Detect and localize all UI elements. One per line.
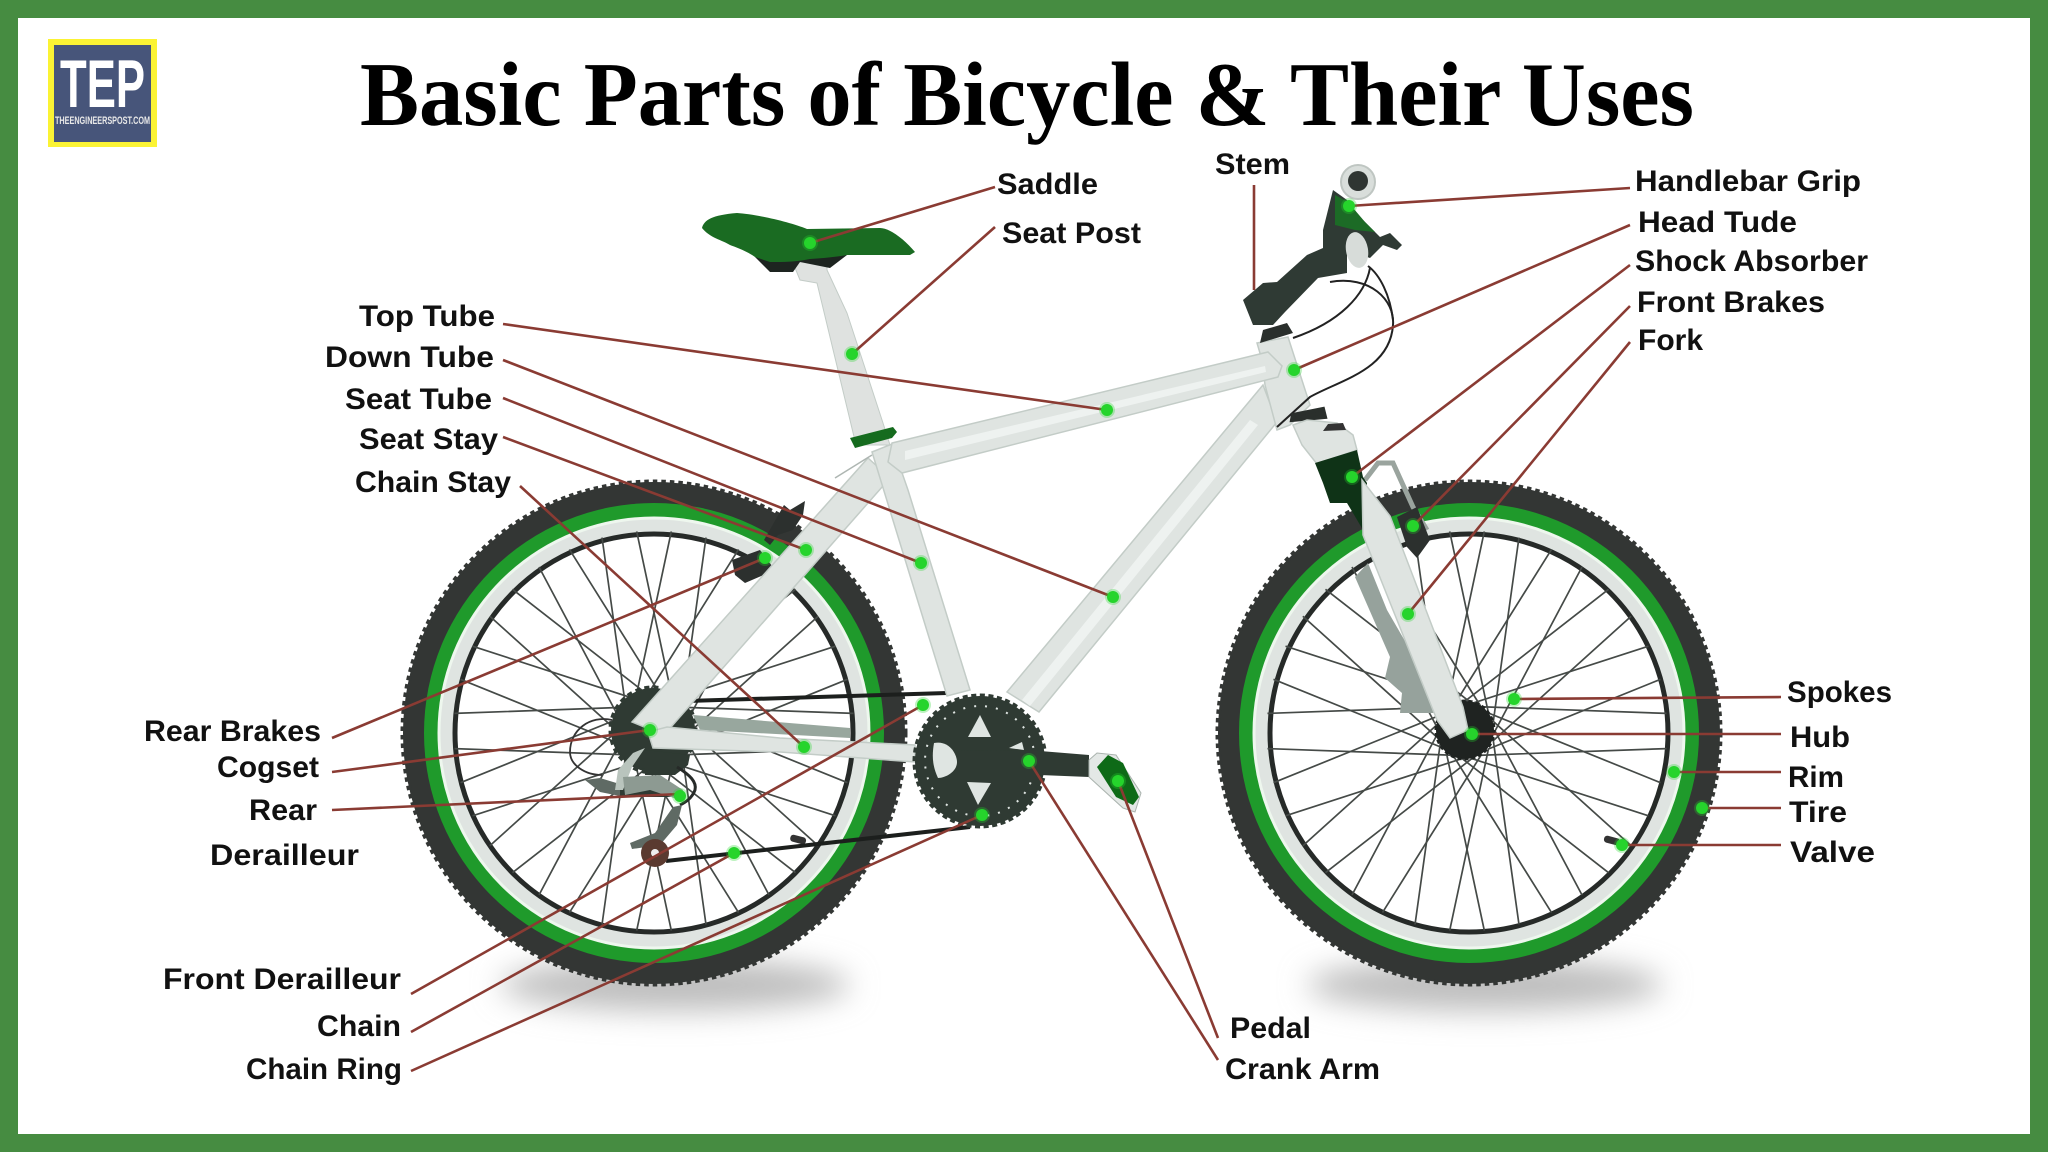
title: Basic Parts of Bicycle & Their Uses xyxy=(360,44,1694,145)
label: Stem: Stem xyxy=(1215,148,1290,181)
label: Valve: Valve xyxy=(1790,836,1875,869)
label: Front Brakes: Front Brakes xyxy=(1637,286,1825,319)
seat stay xyxy=(632,458,890,735)
grip xyxy=(1341,165,1375,199)
chain stay shadow xyxy=(693,715,850,738)
top tube xyxy=(888,352,1282,473)
brake lever xyxy=(1343,230,1371,270)
down tube xyxy=(1007,385,1277,712)
fork xyxy=(1362,480,1468,738)
label: Spokes: Spokes xyxy=(1787,676,1892,709)
highlight on top tube xyxy=(905,366,1266,460)
label: Down Tube: Down Tube xyxy=(325,341,494,374)
label: Fork: Fork xyxy=(1638,324,1703,357)
logo: TEP: TEP xyxy=(60,46,145,122)
label: Pedal: Pedal xyxy=(1230,1012,1311,1045)
logo: TEP xyxy=(48,39,157,147)
label: Handlebar Grip: Handlebar Grip xyxy=(1635,165,1861,198)
label: Crank Arm: Crank Arm xyxy=(1225,1053,1380,1086)
label: Seat Tube: Seat Tube xyxy=(345,383,492,416)
label: Front Derailleur: Front Derailleur xyxy=(163,963,401,996)
label: Rim: Rim xyxy=(1788,761,1844,794)
wheel shadows xyxy=(500,959,1663,1011)
front brake xyxy=(1365,463,1430,558)
saddle xyxy=(702,213,915,272)
label: Head Tude: Head Tude xyxy=(1638,206,1797,239)
label: Seat Post: Seat Post xyxy=(1002,217,1141,250)
label: Seat Stay: Seat Stay xyxy=(359,423,498,456)
label: Saddle: Saddle xyxy=(997,168,1098,201)
front hub disc xyxy=(1436,701,1494,759)
cogset xyxy=(611,688,695,772)
fork inner leg xyxy=(1355,563,1437,713)
crank arm xyxy=(960,750,1089,777)
pedal xyxy=(1089,753,1141,812)
label: Cogset: Cogset xyxy=(217,751,319,784)
label: Chain Ring: Chain Ring xyxy=(246,1053,402,1086)
valves xyxy=(789,834,1621,846)
head tube xyxy=(1257,337,1310,430)
green marker dots xyxy=(644,200,1708,859)
label: Rear Brakes: Rear Brakes xyxy=(144,715,321,748)
logo: TEP: THEENGINEERSPOST.COM xyxy=(55,115,150,127)
label: Shock Absorber: Shock Absorber xyxy=(1635,245,1868,278)
brake cable loop at rear xyxy=(570,719,612,775)
leader lines xyxy=(332,185,1781,1071)
label: Derailleur: Derailleur xyxy=(210,839,359,872)
fork crown xyxy=(1292,409,1357,464)
label: Chain: Chain xyxy=(317,1010,401,1043)
seat clamp xyxy=(850,427,897,448)
chain ring xyxy=(915,696,1045,826)
label: Chain Stay: Chain Stay xyxy=(355,466,511,499)
front wheel xyxy=(1218,482,1720,984)
label: Rear: Rear xyxy=(249,794,317,827)
frame xyxy=(632,337,1310,762)
green grip tint xyxy=(1335,195,1375,232)
seat tube xyxy=(872,444,970,696)
handlebar and stem xyxy=(1243,165,1402,343)
chain xyxy=(666,693,970,861)
rear wheel xyxy=(403,482,905,984)
shock absorber xyxy=(1315,450,1367,530)
thin brace xyxy=(835,455,872,478)
label: Hub: Hub xyxy=(1790,721,1850,754)
label: Tire: Tire xyxy=(1789,796,1847,829)
seat post xyxy=(793,258,890,445)
rear derailleur xyxy=(585,748,695,867)
headset xyxy=(1260,323,1293,343)
highlight on down tube xyxy=(1022,420,1258,706)
brake cables xyxy=(1277,266,1393,427)
chain stay xyxy=(648,727,915,762)
label: Top Tube: Top Tube xyxy=(359,300,495,333)
rear brake xyxy=(732,501,805,583)
